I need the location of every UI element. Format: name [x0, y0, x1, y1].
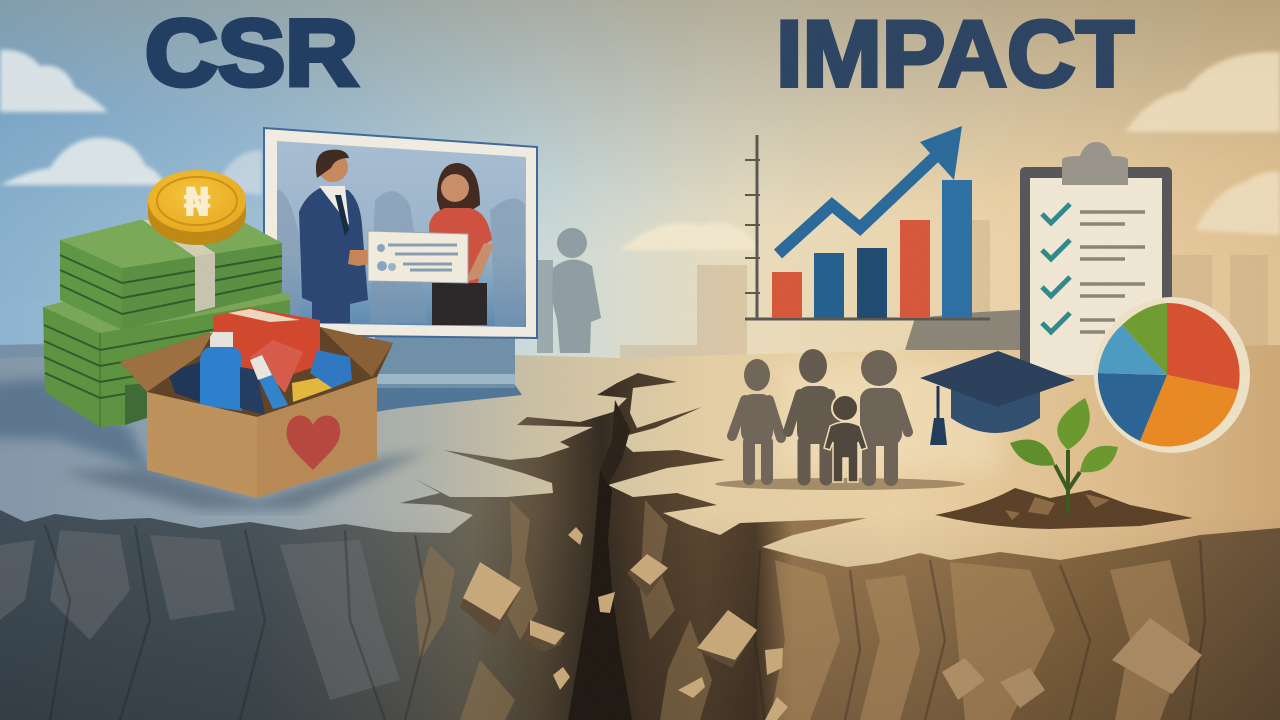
clouds: [0, 50, 1280, 250]
checks: [1042, 204, 1070, 332]
man in navy suit: [299, 150, 380, 323]
photo frame: handover ceremony: [264, 128, 537, 388]
donation box: [120, 308, 393, 498]
frame border: [264, 128, 537, 338]
pie chart: [1094, 297, 1250, 453]
seedling in soil: [935, 398, 1193, 529]
naira coin: [148, 170, 246, 245]
bars: [772, 272, 802, 318]
sky background: [0, 0, 1280, 400]
title: IMPACT: IMPACT: [776, 1, 1134, 106]
frame stand: [375, 336, 515, 388]
tall adult: [788, 349, 838, 479]
box contents: [168, 308, 352, 415]
cheque: [368, 231, 468, 283]
left person: [732, 359, 781, 479]
heart: [287, 416, 340, 470]
ground plateau: [0, 343, 1280, 600]
box faces: [147, 392, 257, 498]
naira coin: ₦: [183, 180, 211, 226]
child: [824, 395, 867, 482]
background silhouettes: crowd: [537, 228, 601, 353]
money stacks: [43, 220, 290, 427]
lower stack: [43, 290, 290, 427]
deep centre fissure: [568, 470, 632, 720]
rock face streaks: [415, 500, 712, 720]
upper stack: [60, 220, 282, 330]
cliff face with jagged chasm: [0, 373, 1280, 720]
grey panel behind chart: [905, 310, 1020, 350]
distant city skyline: [620, 220, 1268, 365]
family silhouettes: [715, 349, 965, 490]
title: CSR: CSR: [145, 0, 358, 105]
falling rocks: [460, 527, 1202, 720]
growth arrow: [778, 154, 938, 254]
box interior: [120, 327, 393, 417]
bar chart with rising arrow: [745, 126, 990, 320]
woman in red top: [429, 163, 494, 325]
clipboard checklist: [1020, 142, 1172, 375]
fissure branch: [600, 400, 630, 485]
right adult: [860, 350, 908, 479]
graduation cap: [920, 351, 1075, 445]
box flaps: [120, 332, 213, 392]
photo background: [277, 141, 526, 327]
checklist lines: [1080, 212, 1145, 332]
